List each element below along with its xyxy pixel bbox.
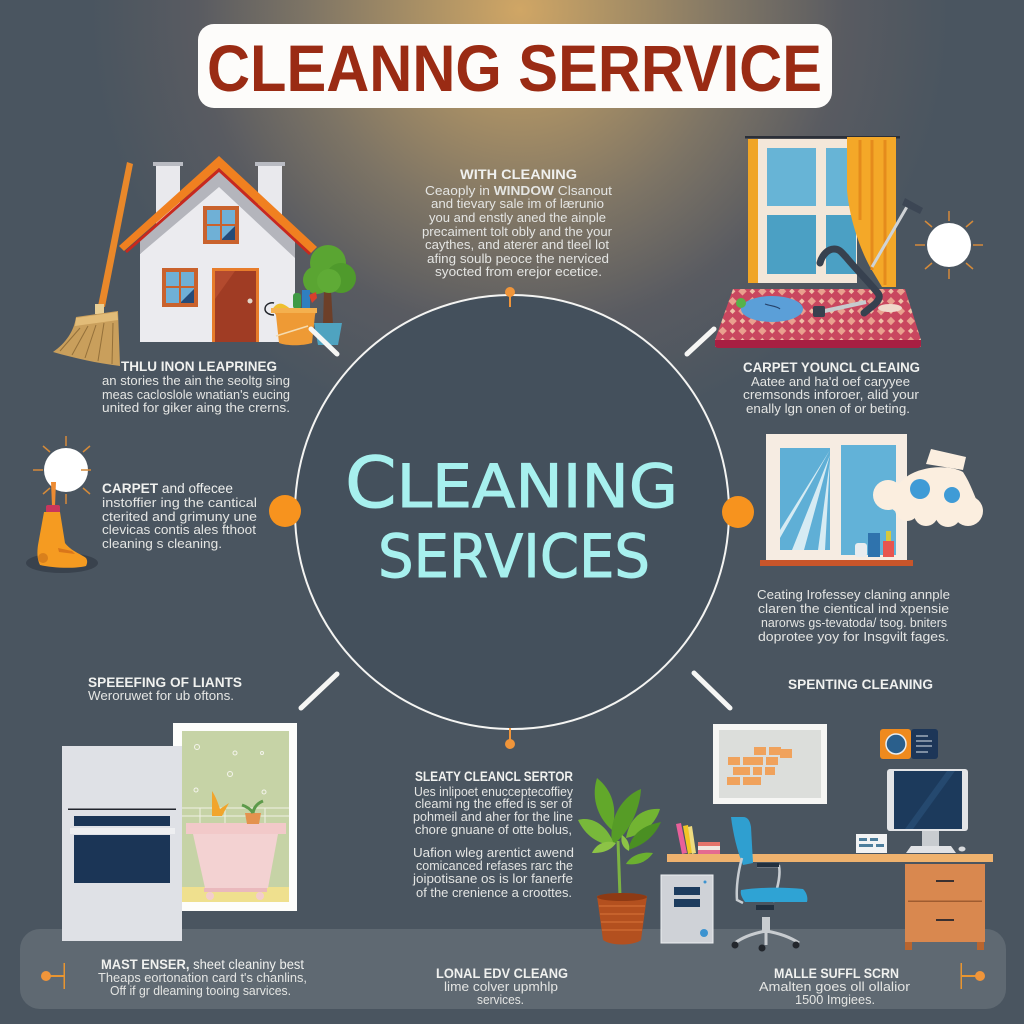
- footer text: center: [436, 966, 568, 1007]
- text: top right: CARPET YOUNCL CLEAING: [743, 360, 920, 375]
- drawers: [905, 864, 985, 950]
- text: top left: an stories the ain the seoltg sing: [102, 374, 290, 388]
- picture: bathtub: [173, 723, 297, 911]
- text: top center: afing soulb peoce the nerviced: [427, 252, 609, 266]
- sill: [760, 560, 913, 566]
- text: bottom left heading: Weroruwet for ub oftons.: [88, 689, 234, 703]
- text: bottom center: Ues inlipoet enucceptecoffiey: [414, 785, 574, 799]
- center title: CLEANING: [345, 442, 678, 524]
- text: right middle: claren the cientical ind xpensie: [758, 602, 949, 616]
- text: top center: syocted from erejor ecetice.: [435, 265, 602, 279]
- text: top center: WITH CLEANING: [460, 167, 577, 182]
- text: top right: [743, 360, 920, 416]
- text: top right: Aatee and ha'd oef caryyee: [751, 375, 910, 389]
- icon: patterned carpet: [715, 289, 921, 348]
- footer: right end marker: [960, 963, 985, 989]
- bottom band: [20, 929, 1006, 1009]
- text: top center: [422, 167, 613, 279]
- heading: spenting cleaning: SPENTING CLEANING: [788, 677, 933, 692]
- text: bottom left heading: [88, 675, 242, 703]
- footer: left end marker: [41, 963, 65, 989]
- footer text: left: MAST ENSER, sheet cleaniny best: [101, 957, 304, 972]
- footer text: left: [98, 957, 307, 998]
- text: top left: united for giker aing the crerns.: [102, 401, 290, 415]
- icon: monitor: [887, 769, 968, 853]
- icon: potted plant: [578, 778, 661, 944]
- text: top right: cremsonds inforoer, alid your: [743, 388, 919, 402]
- text: top right: enally lgn onen of or beting.: [746, 402, 910, 416]
- icon: vacuum on carpet: [813, 198, 923, 317]
- icon: tree in pot: [303, 245, 356, 345]
- center title: SERVICES: [378, 522, 650, 592]
- icon: office chair: [731, 817, 807, 952]
- text: left middle: instoffier ing the cantical: [102, 496, 257, 510]
- text: left middle: [102, 481, 257, 551]
- text: left middle: clevicas contis ales fthoot: [102, 523, 257, 537]
- icon: curtained window: [745, 136, 900, 287]
- footer text: center: services.: [477, 993, 524, 1007]
- text: top center: precaiment tolt obly and the your: [422, 225, 612, 239]
- text: bottom center: comicanced refases rarc the: [416, 859, 573, 873]
- connector dots: [269, 287, 754, 749]
- text: top center: you and enstly aned the ainple: [429, 211, 606, 225]
- text: top left: THLU INON LEAPRINEG: [121, 359, 277, 374]
- icon: oven: [62, 746, 182, 941]
- footer text: right: Amalten goes oll ollalior: [759, 980, 910, 994]
- icon: house: [119, 156, 317, 342]
- text: bottom left heading: SPEEEFING OF LIANTS: [88, 675, 242, 690]
- text: left middle: cleaning s cleaning.: [102, 537, 222, 551]
- text: right middle: Ceating Irofessey claning annple: [757, 588, 950, 602]
- footer text: right: 1500 Imgiees.: [795, 993, 875, 1007]
- icon: broom: [53, 162, 133, 366]
- text: bottom center: of the crenience a croottes.: [416, 886, 572, 900]
- text: top center: and tievary sale im of lærunio: [431, 197, 604, 211]
- icon: camera badge: [880, 729, 938, 759]
- icon: pc tower: [661, 875, 713, 943]
- text: bottom center: SLEATY CLEANCL SERTOR: [415, 769, 573, 784]
- footer text: right: [759, 966, 910, 1007]
- text: bottom center: joipotisane os is lor fanerfe: [412, 872, 573, 886]
- text: bottom center: chore gnuane of otte bolus,: [415, 823, 572, 837]
- text: left middle: CARPET and offecee: [102, 481, 233, 496]
- icon: upright vacuum: [26, 482, 98, 573]
- icon: sun left: [33, 436, 91, 504]
- books: [676, 823, 720, 854]
- text: bottom center: [412, 769, 574, 900]
- text: top left: meas cacloslole wnatian's eucing: [102, 388, 290, 402]
- footer text: right: MALLE SUFFL SCRN: [774, 966, 899, 981]
- icon: cleaning bucket: [265, 290, 317, 345]
- footer text: left: Off if gr dleaming tooing sarvices.: [110, 984, 291, 998]
- text: bottom center: pohmeil and aher for the line: [413, 810, 573, 824]
- icon: clean window: [760, 434, 913, 566]
- title banner: CLEANNG SERRVICE: [207, 31, 822, 105]
- icon: cleaning bottle cloud: [873, 449, 983, 527]
- text: top left: [102, 359, 290, 415]
- footer text: left: Theaps eortonation card t's chanlins,: [98, 971, 307, 985]
- text: bottom center: cleami ng the effed is ser of: [415, 797, 573, 811]
- bottles: [855, 531, 894, 557]
- icon: desk with books: [667, 823, 993, 950]
- window upper: [203, 206, 239, 244]
- text: right middle: [757, 588, 950, 644]
- text: top center: caythes, and aterer and tleel lot: [425, 238, 610, 252]
- icon: sun right: [915, 211, 983, 279]
- door: [212, 268, 259, 342]
- icon: whiteboard: [713, 724, 827, 804]
- text: top center: Ceaoply in WINDOW Clsanout: [425, 184, 613, 198]
- central circle: [295, 295, 729, 729]
- text: right middle: doprotee yoy for Insgvilt fages.: [758, 630, 949, 644]
- footer text: center: LONAL EDV CLEANG: [436, 966, 568, 981]
- text: left middle: cterited and grimuny une: [102, 510, 257, 524]
- center title: [345, 442, 678, 592]
- window lower: [162, 268, 198, 307]
- footer text: center: lime colver upmhlp: [444, 980, 558, 994]
- connector bars: [301, 329, 730, 708]
- text: right middle: narorws gs-tevatoda/ tsog. bniters: [761, 616, 947, 630]
- text: bottom center: Uafion wleg arentict awend: [413, 846, 574, 860]
